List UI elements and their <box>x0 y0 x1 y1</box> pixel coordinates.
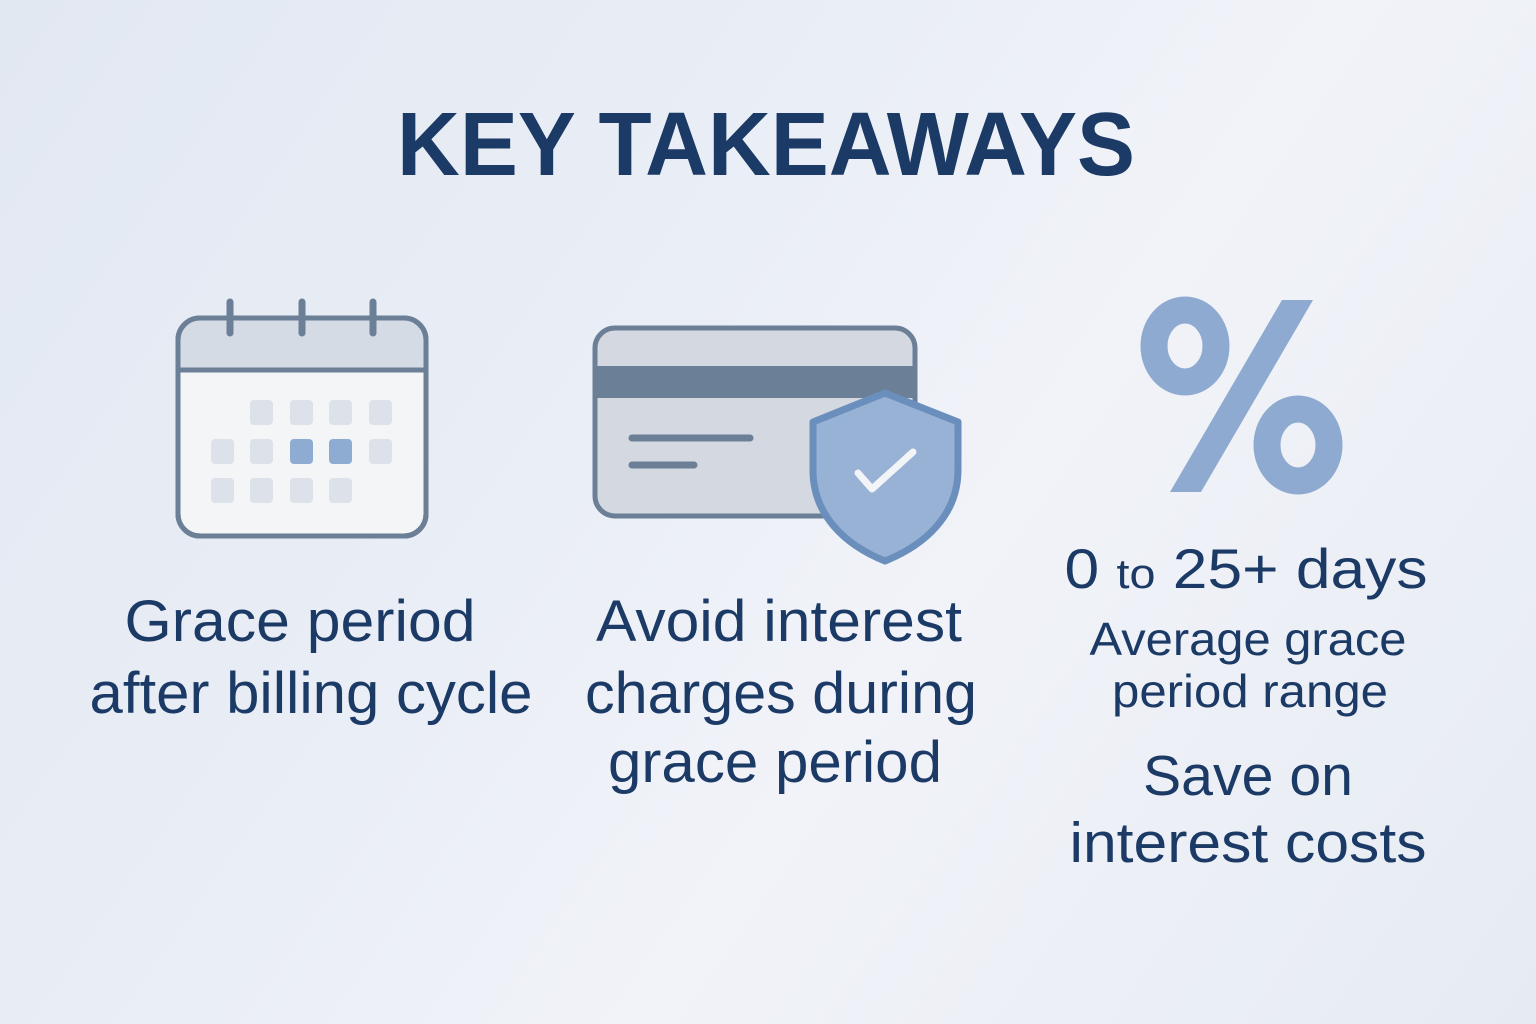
text: column 3 stat: Average grace <box>1090 613 1406 665</box>
text: column 2 <box>585 589 977 795</box>
text: column 2: grace period <box>608 730 942 795</box>
icon: percent <box>1154 300 1329 492</box>
text: column 3 stat: interest costs <box>1070 811 1426 875</box>
title: KEY TAKEAWAYS <box>397 95 1135 195</box>
text: column 1: after billing cycle <box>90 661 532 726</box>
text: column 1 <box>90 589 532 726</box>
text: column 2: Avoid interest <box>596 589 962 654</box>
text: column 2: charges during <box>585 661 977 726</box>
text: column 3 stat: period range <box>1112 665 1388 717</box>
icon: calendar <box>178 302 426 536</box>
text: column 3 stat: 0 to 25+ days <box>1064 537 1428 600</box>
icon: credit card with shield <box>595 328 958 561</box>
text: column 1: Grace period <box>124 589 476 654</box>
text: column 3 stat: Save on <box>1143 744 1353 808</box>
text: column 3 stat <box>1064 537 1428 875</box>
